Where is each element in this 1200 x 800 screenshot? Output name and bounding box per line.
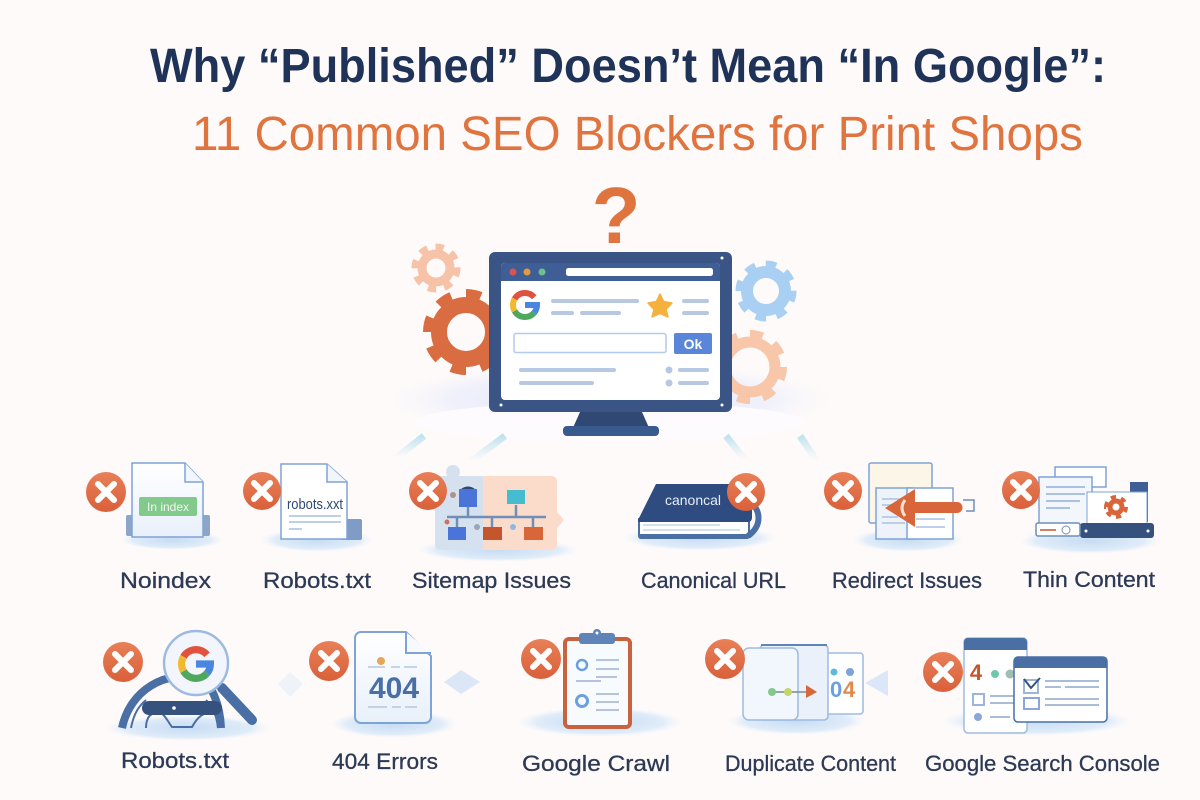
decorative arrow <box>865 670 888 696</box>
error badge <box>103 642 143 682</box>
item: Noindex: Noindex <box>120 568 211 593</box>
item: Robots.txt magnifier: Robots.txt <box>121 748 229 773</box>
back window: 4 <box>970 660 983 685</box>
sitemap tree <box>444 486 546 540</box>
gear <box>1106 497 1126 517</box>
item: Noindex <box>86 463 224 593</box>
icon: large peach gear <box>717 334 783 400</box>
platform <box>380 360 840 440</box>
item: Redirect Issues: Redirect Issues <box>832 568 982 593</box>
item: 404 Errors: 404 Errors <box>332 749 438 774</box>
front window <box>1014 657 1107 722</box>
icon: star <box>648 294 672 317</box>
item: Canonical URL: Canonical URL <box>641 568 786 593</box>
result lines <box>519 299 709 386</box>
error badge <box>309 641 349 681</box>
item: Robots.txt magnifier <box>103 631 272 773</box>
item: Redirect Issues <box>824 463 982 593</box>
item: Canonical URL <box>622 473 786 593</box>
error badge <box>86 472 126 512</box>
item: Google Crawl <box>516 629 684 776</box>
item: Robots.txt <box>243 464 374 593</box>
error badge <box>243 472 281 510</box>
item: Google Search Console: Google Search Console <box>925 751 1160 776</box>
icon: google G <box>182 650 210 678</box>
icon: google G <box>513 293 537 317</box>
item: Duplicate Content: Duplicate Content <box>725 751 896 776</box>
monitor <box>489 252 732 436</box>
item: Sitemap Issues <box>409 465 580 593</box>
back window <box>964 638 1027 733</box>
search button <box>674 333 712 354</box>
item: Google Crawl: Google Crawl <box>522 751 670 776</box>
decorative arrow <box>444 670 480 694</box>
error badge <box>1002 471 1040 509</box>
item: Google Search Console <box>923 638 1160 776</box>
number fragment: 0 <box>830 677 842 702</box>
item: Canonical URL: canoncal <box>665 492 721 508</box>
icon: question mark: ? <box>592 171 640 260</box>
decorative arrow <box>278 672 303 697</box>
search box <box>514 334 666 352</box>
search button: Ok <box>684 336 703 352</box>
error badge <box>705 639 745 679</box>
number fragment: 4 <box>843 677 856 702</box>
icon: large orange gear <box>428 294 504 370</box>
number fragment <box>830 677 856 702</box>
connector beams <box>396 436 816 462</box>
item: Noindex: In index <box>147 500 189 514</box>
item: Thin Content: Thin Content <box>1023 567 1155 592</box>
item: 404 Errors: 404 <box>369 672 419 705</box>
icon: small peach gear <box>415 247 457 289</box>
error badge <box>521 639 561 679</box>
title: Why “Published” Doesn’t Mean “In Google”: <box>150 40 1106 93</box>
item: Thin Content <box>1002 467 1162 592</box>
icon: blue gear <box>739 264 793 318</box>
error badge <box>923 652 963 692</box>
item: Duplicate Content <box>705 639 896 776</box>
error badge <box>824 472 862 510</box>
item: Sitemap Issues: Sitemap Issues <box>412 568 571 593</box>
item: Robots.txt: robots.xxt <box>287 496 344 513</box>
item: 404 Errors <box>309 632 458 774</box>
error badge <box>409 472 447 510</box>
item: Robots.txt: Robots.txt <box>263 568 371 593</box>
title <box>150 40 1106 161</box>
hero: monitor with gears <box>380 171 840 462</box>
title: 11 Common SEO Blockers for Print Shops <box>192 108 1083 161</box>
error badge <box>727 473 765 511</box>
